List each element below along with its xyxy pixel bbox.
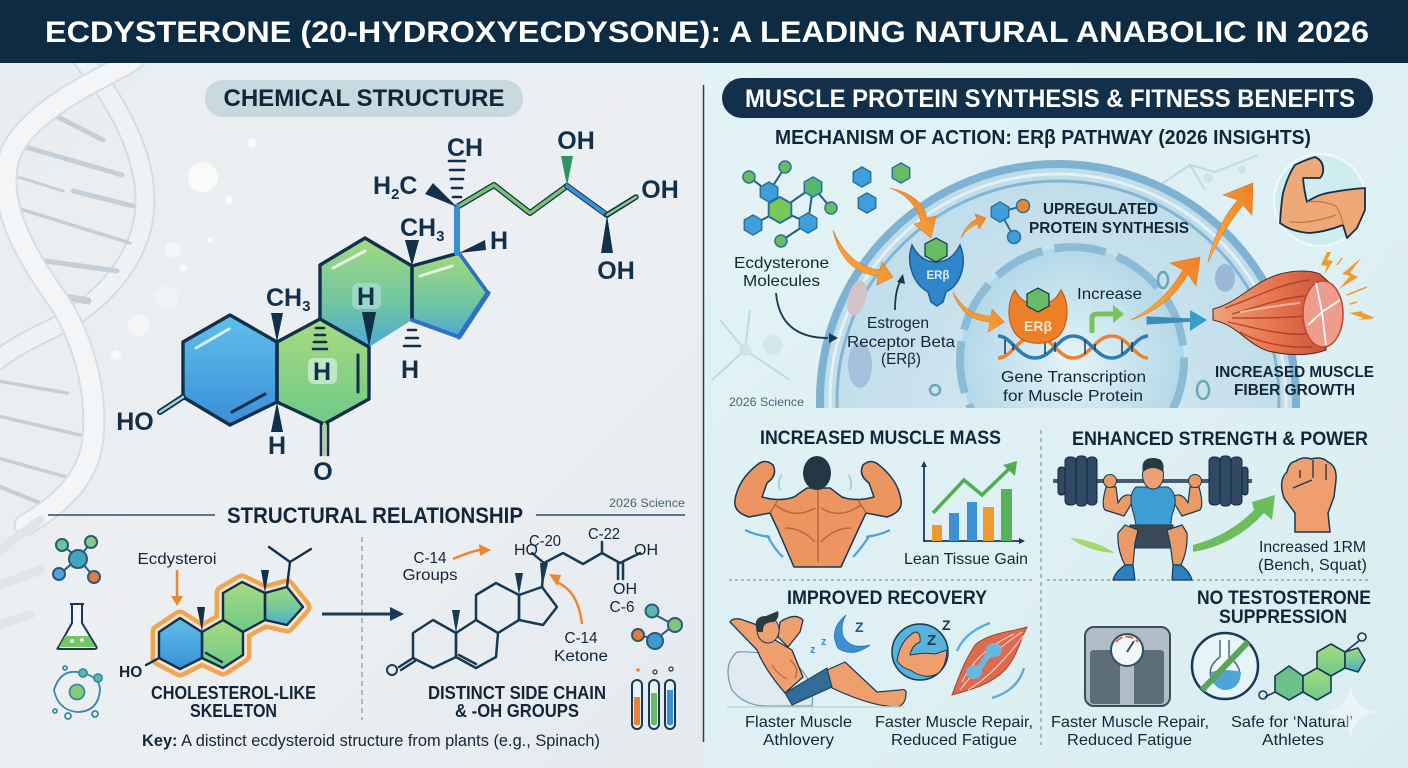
icon: moon and sleep: Z [855, 619, 864, 635]
heading: muscle protein synthesis [722, 78, 1373, 118]
DNA strand [998, 336, 1148, 358]
icon: weighing scale [1085, 627, 1170, 706]
labels: recovery: Athlovery [763, 732, 834, 749]
label: estrogen receptor beta: Estrogen [867, 315, 929, 332]
panel: right background [704, 63, 1408, 768]
molecule: cholesterol-like skeleton [119, 547, 311, 681]
small product molecule [991, 200, 1030, 244]
chain labels: OH [613, 581, 637, 598]
label: distinct side chain: & -OH GROUPS [455, 701, 579, 721]
label: increased muscle fiber growth: INCREASED MUSCLE [1215, 364, 1374, 381]
arrow: c-14 groups [453, 544, 491, 559]
chain labels: C-14 [564, 630, 598, 647]
receptor: ERβ blue: ERβ [926, 270, 950, 282]
label: increase: Increase [1077, 286, 1142, 303]
heading: ENHANCED STRENGTH & POWER [1072, 429, 1368, 450]
chain labels: Groups [402, 567, 458, 584]
label: distinct side chain [428, 683, 606, 721]
labels: recovery: Faster Muscle Repair, [875, 714, 1033, 731]
labels: testosterone [1051, 714, 1353, 749]
atom labels: 2 [391, 186, 399, 203]
heading: INCREASED MUSCLE MASS [760, 428, 1001, 449]
label: estrogen receptor beta [847, 315, 955, 368]
label: increased muscle fiber growth [1215, 364, 1374, 399]
atom labels [116, 127, 679, 486]
chain labels [402, 526, 658, 665]
icon: no flask [1192, 633, 1258, 699]
title banner [0, 0, 1408, 63]
icon: bicep in circle: Z [927, 632, 936, 649]
panel: chemical structure [116, 80, 679, 486]
icon: flask [57, 604, 97, 649]
atom labels: H [490, 227, 508, 255]
label: upregulated protein synthesis [1029, 201, 1189, 237]
arrow: skeleton to ecdysterone [322, 607, 404, 621]
label: lean tissue gain: Lean Tissue Gain [904, 551, 1028, 568]
icon: muscular back [735, 456, 901, 567]
label: gene transcription [1001, 369, 1146, 405]
receptor: ERβ orange [1009, 288, 1067, 343]
chain labels: C-22 [588, 526, 620, 543]
benefit: increased muscle mass [735, 428, 1028, 568]
molecule: cholesterol-like skeleton: HO [119, 664, 142, 681]
label: gene transcription: Gene Transcription [1001, 369, 1146, 386]
arrow: thin to receptor [776, 274, 905, 343]
heading: structural relationship: STRUCTURAL RELATIONSHIP [227, 503, 523, 528]
panel: structural relationship [48, 496, 685, 750]
chain labels: HO [514, 542, 538, 559]
benefit: no testosterone suppression [1051, 588, 1371, 749]
decorative sparkle [1325, 687, 1377, 737]
icon: molecule [53, 536, 100, 583]
atom labels: CH [400, 214, 436, 242]
arrow: c-14 ketone [549, 574, 582, 624]
labels: recovery: Reduced Fatigue [891, 732, 1017, 749]
benefit: enhanced strength and power [1053, 429, 1368, 580]
icon: steroid skeleton [1259, 633, 1366, 700]
icon: resting man [727, 611, 906, 707]
panel: left background [0, 63, 704, 768]
icon: moon and sleep: z [810, 644, 816, 656]
panel: muscle protein synthesis and benefits [712, 78, 1375, 749]
chain labels: Ketone [554, 648, 608, 665]
icon: fist [1282, 458, 1336, 532]
label: estrogen receptor beta: (ERβ) [881, 351, 921, 368]
atom labels: 3 [436, 228, 444, 245]
heading: muscle protein synthesis: MUSCLE PROTEIN SYNTHESIS & FITNESS BENEFITS [745, 85, 1355, 113]
atom labels: CH [266, 284, 302, 312]
icon: moon and sleep: z [821, 636, 827, 648]
heading: NO TESTOSTERONE [1197, 588, 1371, 609]
molecules: ecdysterone [743, 161, 910, 247]
atom labels: OH [557, 127, 595, 155]
arrow: strength growth [1193, 495, 1275, 552]
label: ecdysterone molecules: Molecules [743, 273, 820, 290]
icon: molecule right [632, 604, 682, 649]
icon: bicep in circle [892, 617, 951, 680]
receptor: ERβ orange: ERβ [1024, 318, 1052, 334]
label: distinct side chain: DISTINCT SIDE CHAIN [428, 683, 606, 703]
label: cholesterol-like skeleton: SKELETON [190, 701, 277, 721]
chart: lean tissue gain [921, 461, 1025, 544]
label: cholesterol-like skeleton [151, 683, 316, 721]
icon: muscle repair [952, 623, 1027, 698]
heading [1197, 588, 1371, 628]
label: gene transcription: for Muscle Protein [1003, 388, 1143, 405]
atom labels: H [401, 356, 419, 384]
label: upregulated protein synthesis: PROTEIN SYNTHESIS [1029, 220, 1189, 237]
label: increased 1RM: (Bench, Squat) [1258, 557, 1367, 574]
arrow: increase [1092, 305, 1124, 333]
molecule: ecdysterone line structure [387, 542, 640, 675]
icon: bicep in circle: Z [942, 617, 951, 633]
label: increased 1RM: Increased 1RM [1259, 539, 1366, 556]
receptor: ERβ blue [910, 238, 963, 306]
atom labels: OH [597, 257, 635, 285]
source note: 2026 Science [729, 395, 804, 409]
labels: recovery [745, 714, 1033, 749]
icon: flexed arm [1274, 154, 1366, 246]
atom labels: HO [116, 408, 154, 436]
molecule: ecdysterone structure [116, 127, 679, 486]
chain labels: C-6 [610, 599, 634, 616]
key note: Key: A distinct ecdysteroid structure from plants (e.g., Spinach) [142, 731, 600, 750]
label: ecdysterone molecules: Ecdysterone [734, 255, 829, 272]
arrow: teal output [1148, 310, 1207, 331]
labels: testosterone: Safe for ‘Natural’ [1231, 714, 1353, 731]
atom labels: H [268, 432, 286, 460]
icon: moon and sleep [810, 615, 870, 656]
chain labels: OH [634, 542, 658, 559]
heading: chemical structure [205, 80, 523, 117]
atom labels: CH [447, 134, 483, 162]
label: cholesterol-like skeleton: CHOLESTEROL-LIKE [151, 683, 316, 703]
label: estrogen receptor beta: Receptor Beta [847, 334, 955, 351]
label: ecdysteroi: Ecdysteroi [138, 551, 216, 568]
arrow: ecdysteroi to skeleton [171, 570, 183, 606]
labels: recovery: Flaster Muscle [745, 714, 852, 731]
labels: testosterone: Faster Muscle Repair, [1051, 714, 1209, 731]
label: ecdysterone molecules [734, 255, 829, 290]
decorative DNA helix [0, 60, 256, 625]
atom labels: OH [641, 176, 679, 204]
heading: chemical structure: CHEMICAL STRUCTURE [224, 85, 504, 112]
heading: SUPPRESSION [1219, 607, 1347, 628]
nucleus [956, 243, 1188, 408]
orange arrows [833, 183, 1253, 332]
atom labels: H [373, 172, 391, 200]
chain labels: C-14 [414, 550, 447, 567]
atom labels: 3 [302, 298, 310, 315]
labels: testosterone: Athletes [1262, 732, 1324, 749]
heading: mechanism of action: MECHANISM OF ACTION: ERβ PATHWAY (2026 INSIGHTS) [775, 127, 1311, 149]
atom labels: H [357, 283, 375, 311]
icon: squat lifter [1053, 456, 1252, 580]
icon: test tubes [632, 667, 675, 729]
icon: muscle fibre [1213, 252, 1375, 355]
atom labels: H [313, 358, 331, 386]
benefit: improved recovery [727, 588, 1033, 749]
label: upregulated protein synthesis: UPREGULATED [1043, 201, 1158, 218]
title banner: ECDYSTERONE (20-HYDROXYECDYSONE): A LEADING NATURAL ANABOLIC IN 2026 [45, 16, 1369, 49]
atom labels: O [313, 458, 333, 486]
source note: 2026 Science [609, 496, 685, 510]
chain labels: C-20 [529, 533, 561, 550]
label: increased muscle fiber growth: FIBER GROWTH [1234, 382, 1355, 399]
icon: atom network [53, 666, 102, 719]
diagram: ERβ pathway [712, 153, 1375, 408]
label: increased 1RM [1258, 539, 1367, 574]
labels: testosterone: Reduced Fatigue [1067, 732, 1192, 749]
heading: IMPROVED RECOVERY [787, 588, 987, 609]
atom labels: C [399, 172, 417, 200]
